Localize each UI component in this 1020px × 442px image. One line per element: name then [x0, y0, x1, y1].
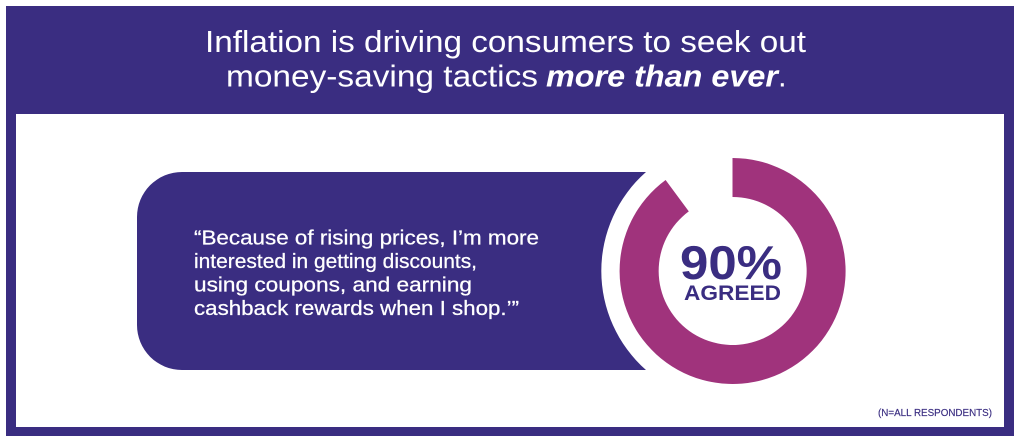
quote text: [194, 228, 539, 320]
donut label: 90%: [680, 236, 782, 289]
quote text: interested in getting discounts,: [194, 251, 477, 273]
title: Inflation is driving consumers to seek out: [205, 24, 806, 59]
panel: quote: [137, 172, 646, 370]
title: money-saving tactics: [226, 58, 538, 94]
quote text: “Because of rising prices, I’m more: [194, 228, 539, 250]
donut label: AGREED: [684, 282, 781, 305]
donut chart: [620, 158, 846, 384]
title: .: [778, 58, 787, 94]
quote text: cashback rewards when I shop.’”: [194, 298, 519, 320]
title: more than ever: [546, 58, 780, 94]
footnote: (N=ALL RESPONDENTS): [878, 408, 992, 419]
quote text: using coupons, and earning: [194, 274, 472, 296]
title: [205, 24, 806, 94]
